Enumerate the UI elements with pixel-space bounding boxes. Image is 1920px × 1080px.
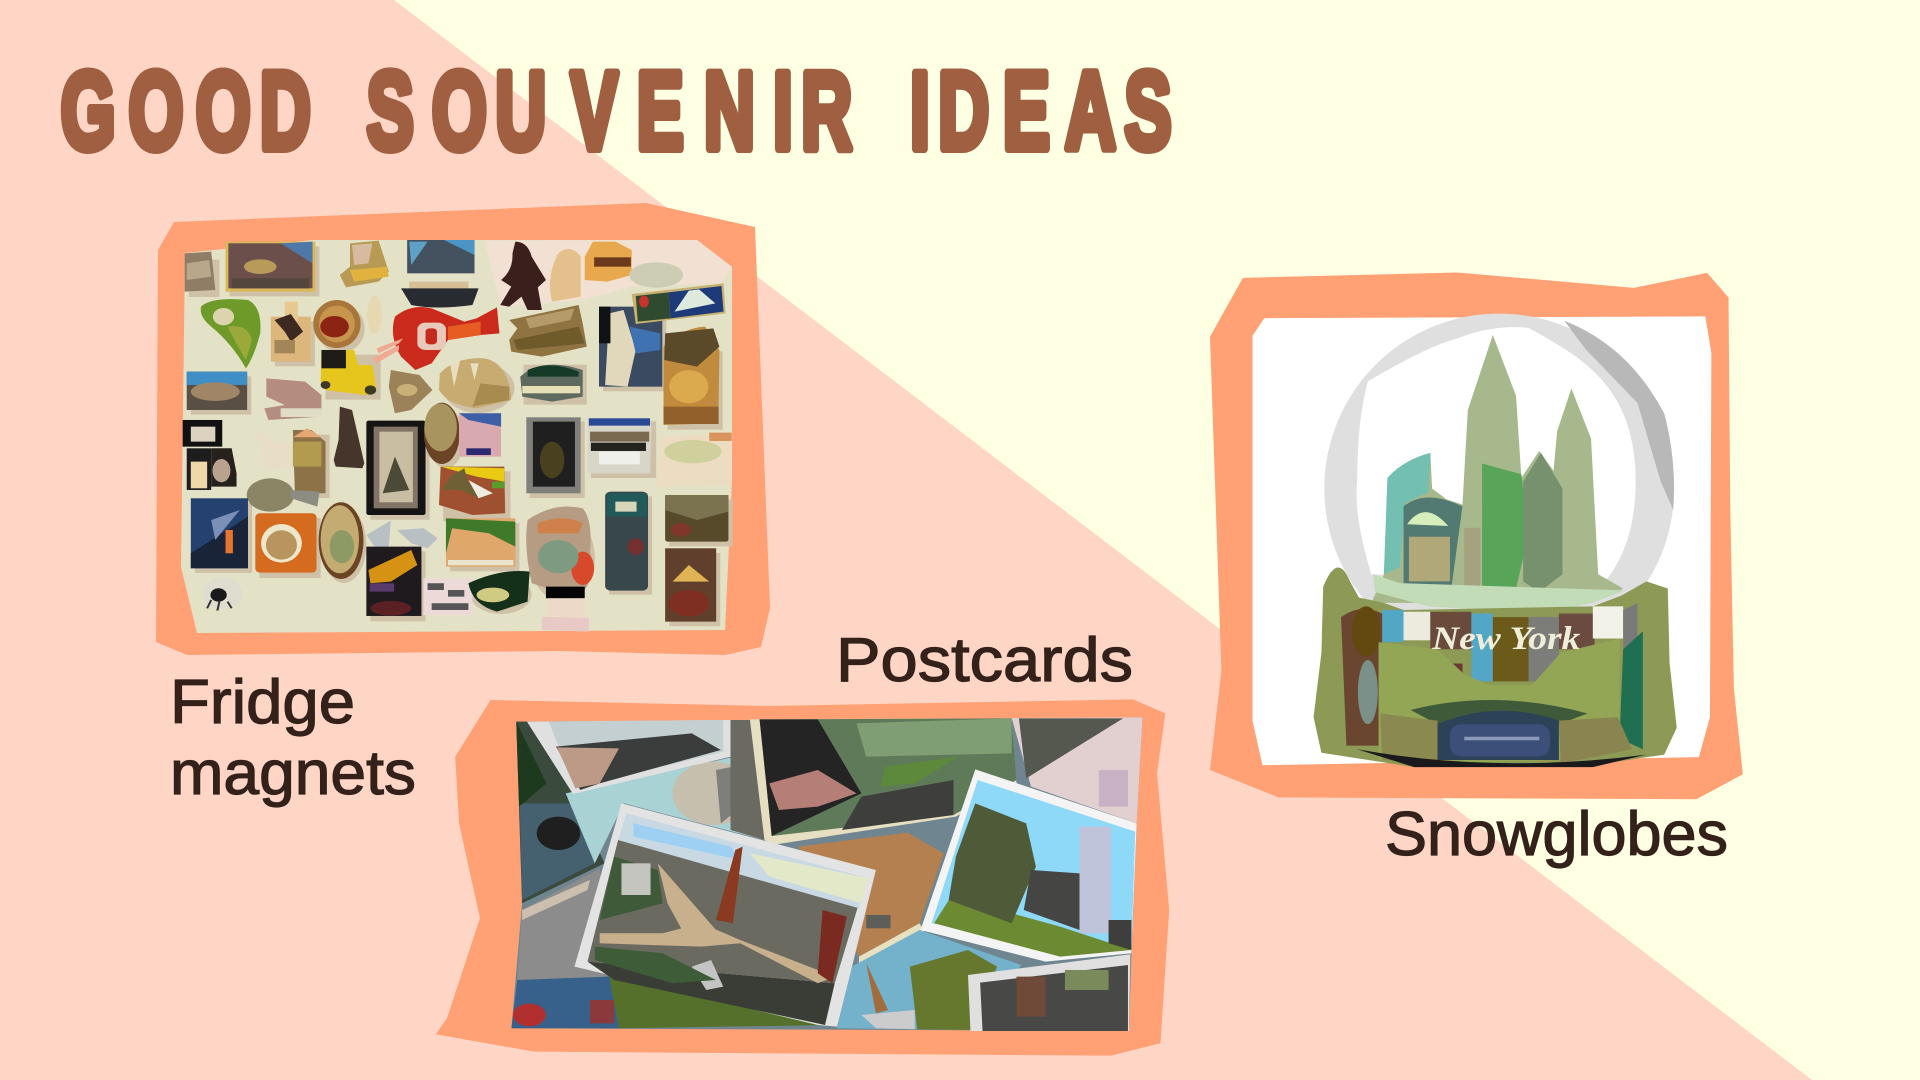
label: Fridge magnets: magnets [170, 739, 416, 808]
title: GOOD SOUVENIR IDEAS [0, 48, 1171, 172]
snowglobe illustration [1314, 314, 1677, 767]
label: Postcards: Postcards [836, 626, 1133, 695]
panel: snowglobe photo [1210, 272, 1743, 799]
panel: fridge magnets photo [156, 203, 770, 655]
label: Fridge magnets [170, 668, 416, 808]
postcards collage [511, 717, 1143, 1031]
label: Fridge magnets: Fridge [170, 668, 355, 737]
panel: postcards photo [436, 699, 1169, 1056]
globe lettering: New York [1431, 621, 1581, 657]
label: Snowglobes: Snowglobes [1385, 800, 1728, 869]
magnets collage [183, 240, 733, 632]
